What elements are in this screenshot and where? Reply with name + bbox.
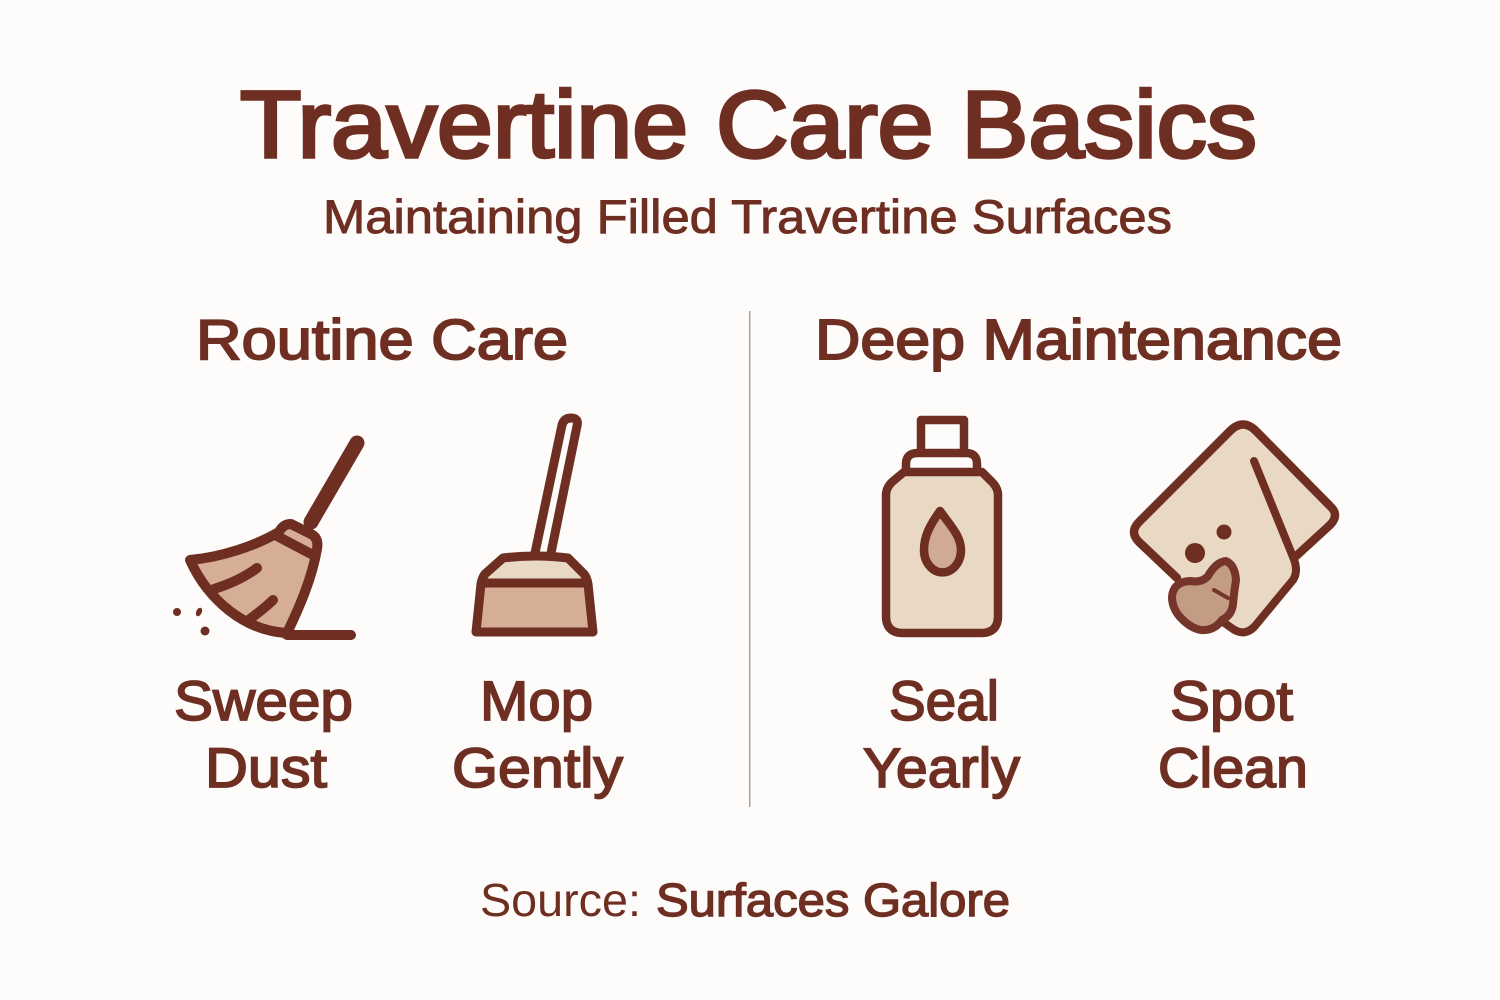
center divider xyxy=(749,311,750,807)
panel: routine care xyxy=(173,308,623,799)
source line: Source: xyxy=(480,874,641,926)
label: seal yearly: Seal xyxy=(889,669,999,732)
label: sweep dust: Dust xyxy=(205,736,327,799)
label: sweep dust: Sweep xyxy=(174,669,353,732)
panel: deep maintenance xyxy=(815,308,1342,799)
label: mop gently: Gently xyxy=(452,736,623,799)
label: mop gently: Mop xyxy=(480,669,593,732)
icon: bottle xyxy=(886,420,998,633)
heading: routine care: Routine Care xyxy=(196,308,568,372)
source line: Surfaces Galore xyxy=(656,874,1010,926)
icon: mop xyxy=(476,418,593,632)
icon: cloth with stain xyxy=(1134,424,1335,632)
icon: broom xyxy=(173,443,357,636)
label: mop gently xyxy=(452,669,623,799)
label: seal yearly: Yearly xyxy=(863,736,1020,799)
label: seal yearly xyxy=(863,669,1020,799)
label: sweep dust xyxy=(174,669,353,799)
title: Travertine Care Basics xyxy=(240,72,1257,178)
label: spot clean xyxy=(1158,669,1308,799)
source line xyxy=(480,874,1010,926)
heading: deep maintenance: Deep Maintenance xyxy=(815,308,1342,372)
label: spot clean: Spot xyxy=(1170,669,1293,732)
subtitle: Maintaining Filled Travertine Surfaces xyxy=(323,190,1172,243)
label: spot clean: Clean xyxy=(1158,736,1308,799)
